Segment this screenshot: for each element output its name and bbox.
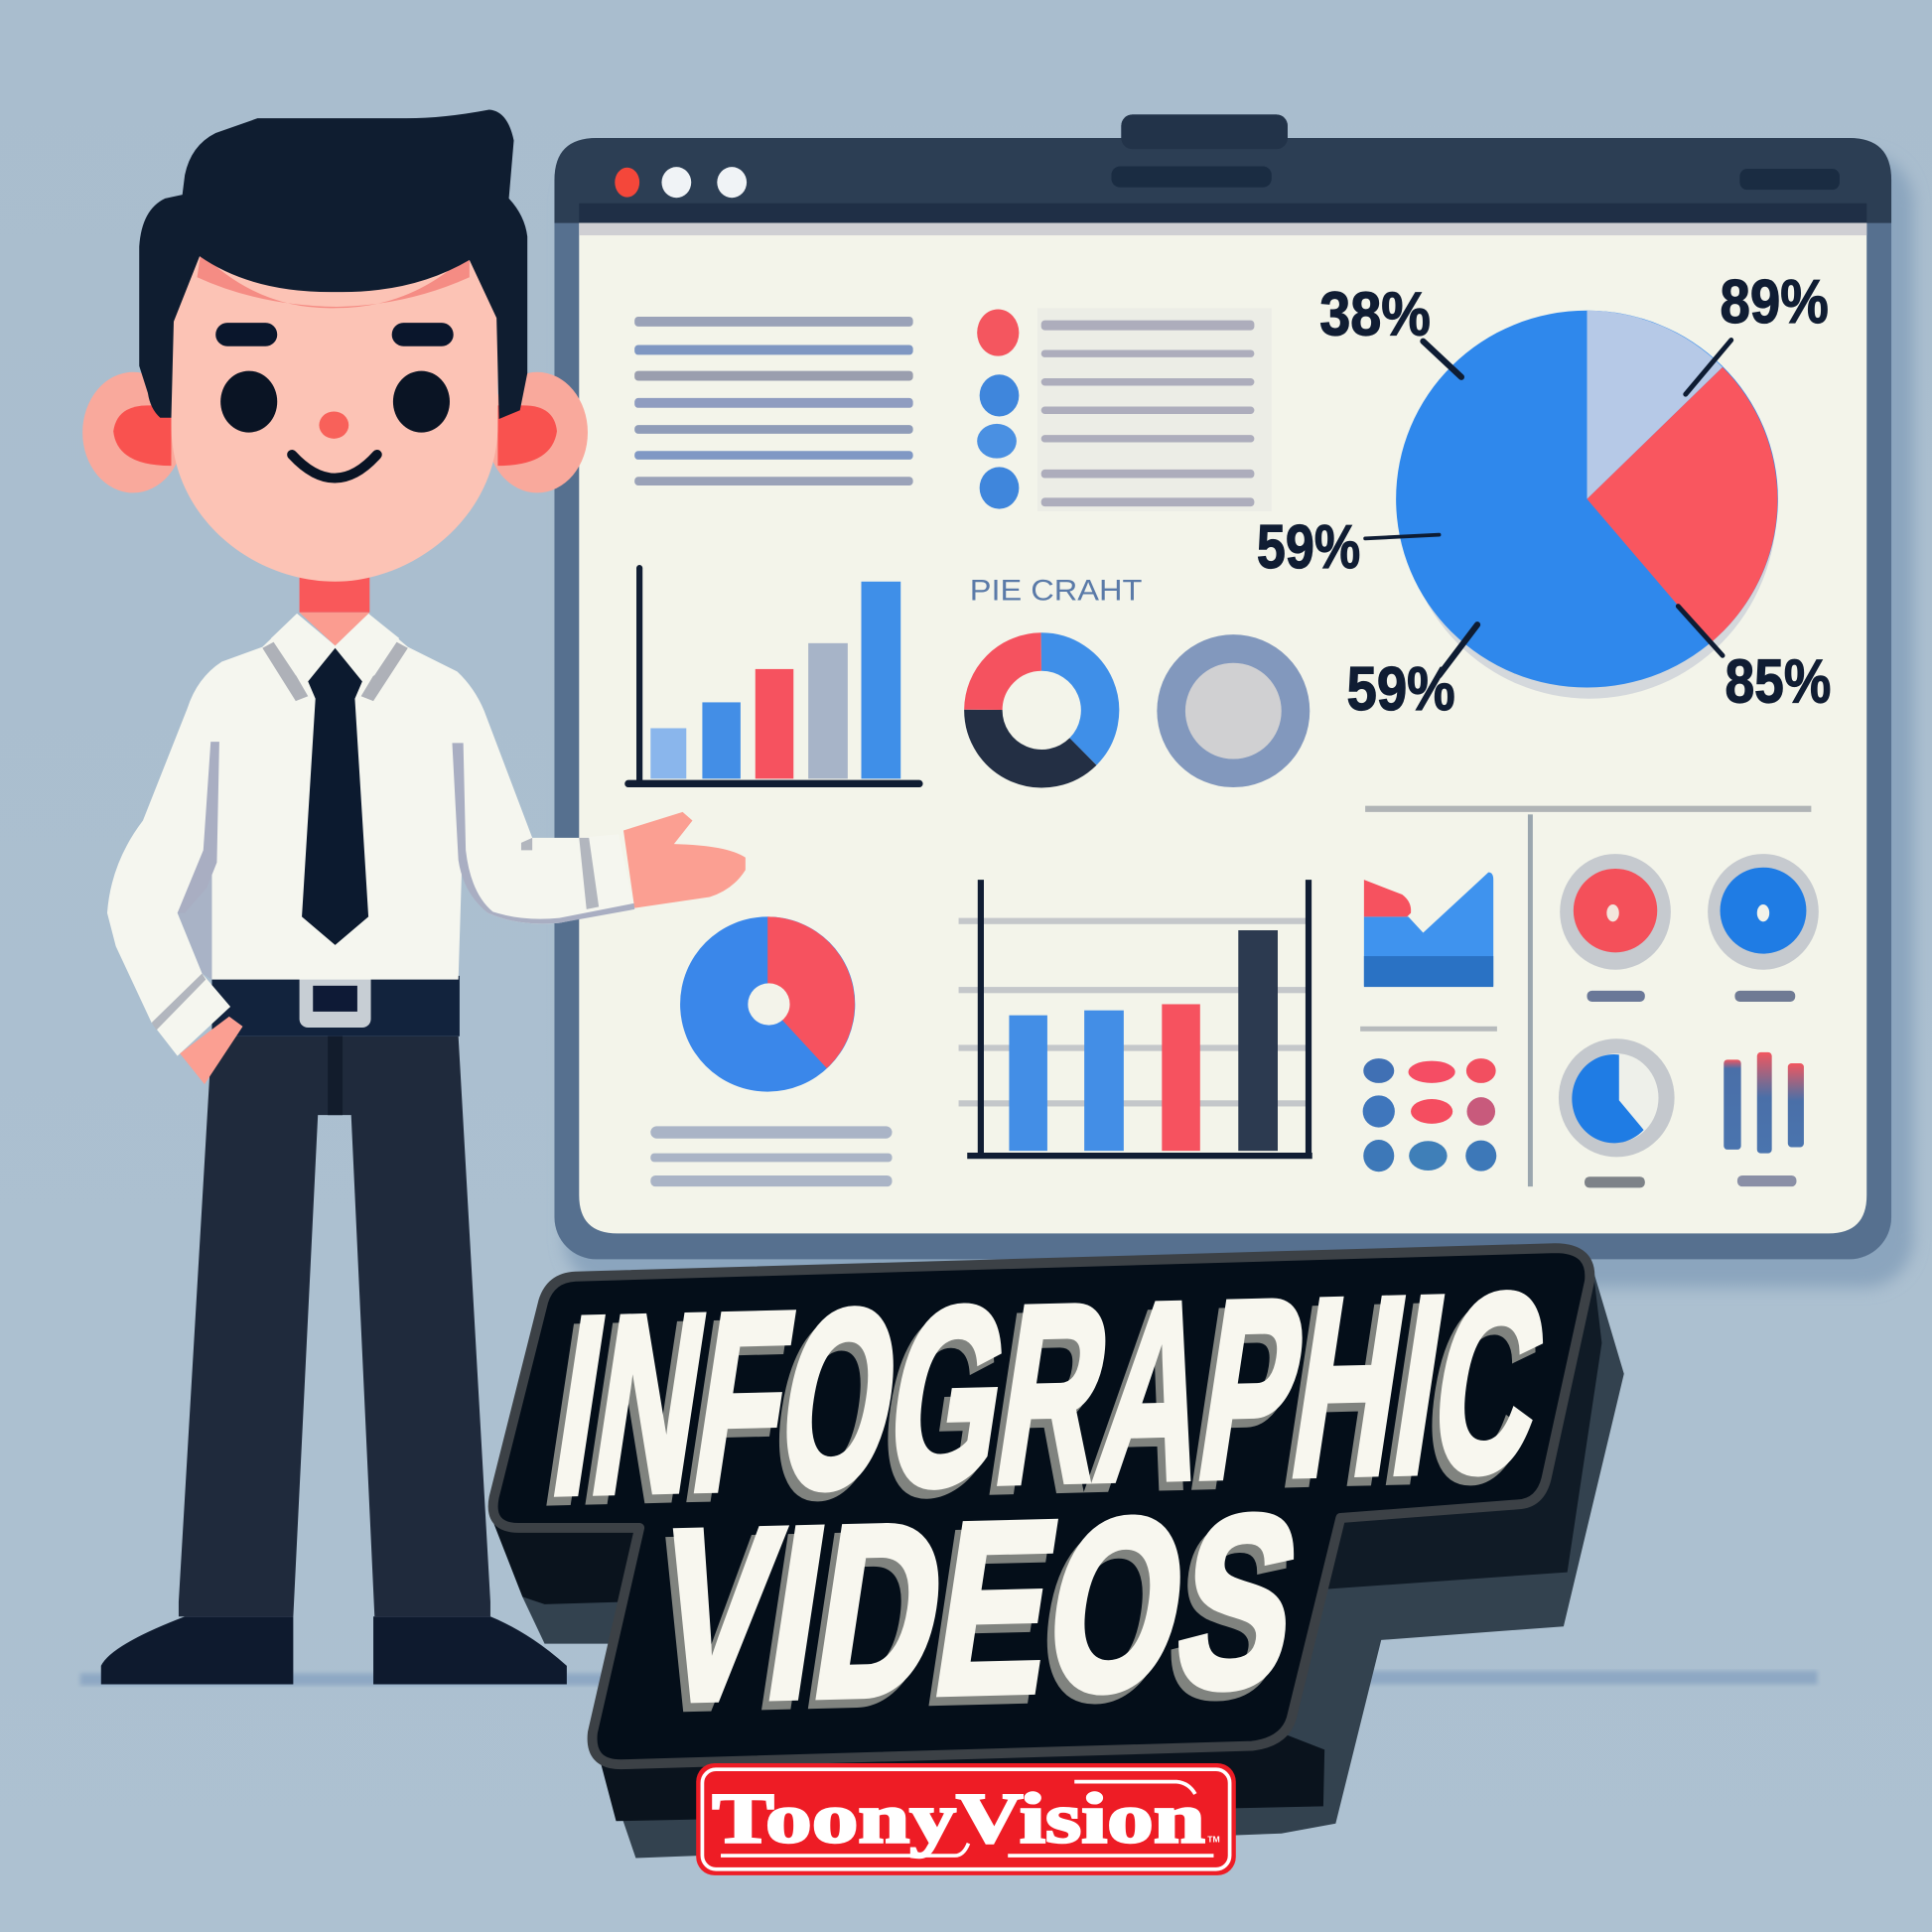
chart: small bar chart [628, 568, 919, 783]
text lines top left [634, 317, 913, 485]
icon: pie gauge [1559, 1038, 1675, 1157]
pie shadow [1402, 317, 1777, 699]
bullet text lines [1041, 321, 1254, 506]
title line 2 extrusion: VIDEOS [634, 1473, 1308, 1761]
pie red slice [1587, 367, 1777, 643]
logo inner border [702, 1769, 1230, 1869]
right shoe [373, 1616, 567, 1685]
chart: donut [983, 652, 1100, 768]
pie labels [1257, 268, 1831, 724]
pie labels: 85% [1725, 647, 1831, 716]
badge face [493, 1248, 1589, 1764]
right cuff band [521, 838, 599, 909]
collar [262, 614, 408, 701]
logo wordmark: ToonyVision [712, 1778, 1205, 1858]
pie labels: 89% [1721, 268, 1829, 337]
belt [211, 976, 460, 1036]
title line 2 [634, 1464, 1314, 1761]
collar edge [262, 640, 408, 701]
screen frame [554, 138, 1891, 1259]
axes [628, 568, 919, 783]
character: presenter [82, 109, 746, 1685]
screen surface [579, 223, 1866, 1233]
panel: presentation screen [554, 114, 1913, 1288]
left shoe [101, 1616, 293, 1685]
title line 1 [531, 1241, 1561, 1557]
lower pie red slice [767, 916, 855, 1068]
badge left extrusion [522, 1596, 628, 1644]
icon: blue dial [1708, 854, 1819, 970]
right ear [486, 372, 588, 492]
eyes [220, 371, 450, 433]
floor shadow [80, 1671, 1818, 1686]
leader lines [1365, 341, 1731, 675]
neck [300, 574, 369, 645]
chart: big pie [1257, 268, 1831, 724]
left ear [82, 372, 184, 492]
dot grid [1363, 1058, 1496, 1172]
pie labels: 38% [1319, 281, 1431, 349]
pie labels: 59% [1346, 655, 1455, 724]
badge extrusion [599, 1271, 1624, 1859]
band under title bar [579, 223, 1866, 235]
chart heading: PIE CRAHT [970, 574, 1142, 607]
buckle [300, 965, 371, 1028]
pants [179, 1036, 490, 1616]
hair [139, 109, 527, 419]
nose [319, 412, 348, 439]
buckle center [313, 986, 357, 1012]
area red [1364, 880, 1411, 916]
window title bar [554, 138, 1891, 223]
smile [292, 455, 377, 479]
left hand [180, 1017, 242, 1084]
axes [967, 880, 1312, 1156]
chart: area chart [1364, 873, 1493, 987]
lower text lines [650, 1126, 893, 1186]
bullet text backdrop [1037, 308, 1272, 511]
left cuff band [152, 973, 206, 1031]
screen drop shadow [564, 154, 1913, 1288]
pie blue slice [1396, 311, 1778, 688]
title bar lower strip [579, 204, 1866, 223]
eyebrows [215, 323, 454, 346]
area base band [1364, 956, 1493, 987]
logo: ToonyVision [696, 1763, 1236, 1875]
shirt fold right [452, 743, 634, 923]
gridlines [959, 918, 1309, 1106]
dashboard dividers [1360, 806, 1811, 1186]
chart: lower pie [680, 916, 855, 1092]
collar leaves [271, 614, 399, 681]
icon: red dial [1560, 854, 1671, 970]
face [172, 252, 497, 582]
badge inner shadow [491, 1518, 1324, 1821]
pie labels: 59% [1257, 513, 1360, 582]
lower pie hole [748, 983, 790, 1026]
shirt fold left [178, 742, 219, 913]
window buttons [615, 167, 747, 198]
screen camera mount [1121, 114, 1288, 164]
shirt [107, 614, 634, 1056]
pie light slice [1587, 311, 1723, 499]
area blue [1364, 873, 1493, 986]
logo trademark: TM [1207, 1834, 1220, 1844]
title bar slots [1111, 167, 1840, 190]
hairline shade [198, 252, 470, 308]
pants seam [328, 1036, 343, 1115]
camera body front [1121, 114, 1288, 149]
title line 2 face: VIDEOS [641, 1464, 1314, 1752]
logo outer plate [696, 1763, 1236, 1875]
arm gap shade [178, 848, 211, 980]
bars [1009, 930, 1278, 1151]
chart: lower bar chart [959, 880, 1312, 1156]
badge upper shade [1320, 1271, 1601, 1589]
dial captions [1585, 991, 1796, 1187]
lower pie base [680, 916, 855, 1092]
chart: ring gauge [1157, 634, 1310, 787]
logo swoosh lines [721, 1782, 1213, 1856]
bars [650, 582, 900, 778]
title badge [491, 1241, 1624, 1859]
icon: mini bars [1724, 1052, 1804, 1154]
bullet markers [977, 310, 1019, 509]
right hand [623, 812, 746, 908]
tie [302, 648, 368, 945]
